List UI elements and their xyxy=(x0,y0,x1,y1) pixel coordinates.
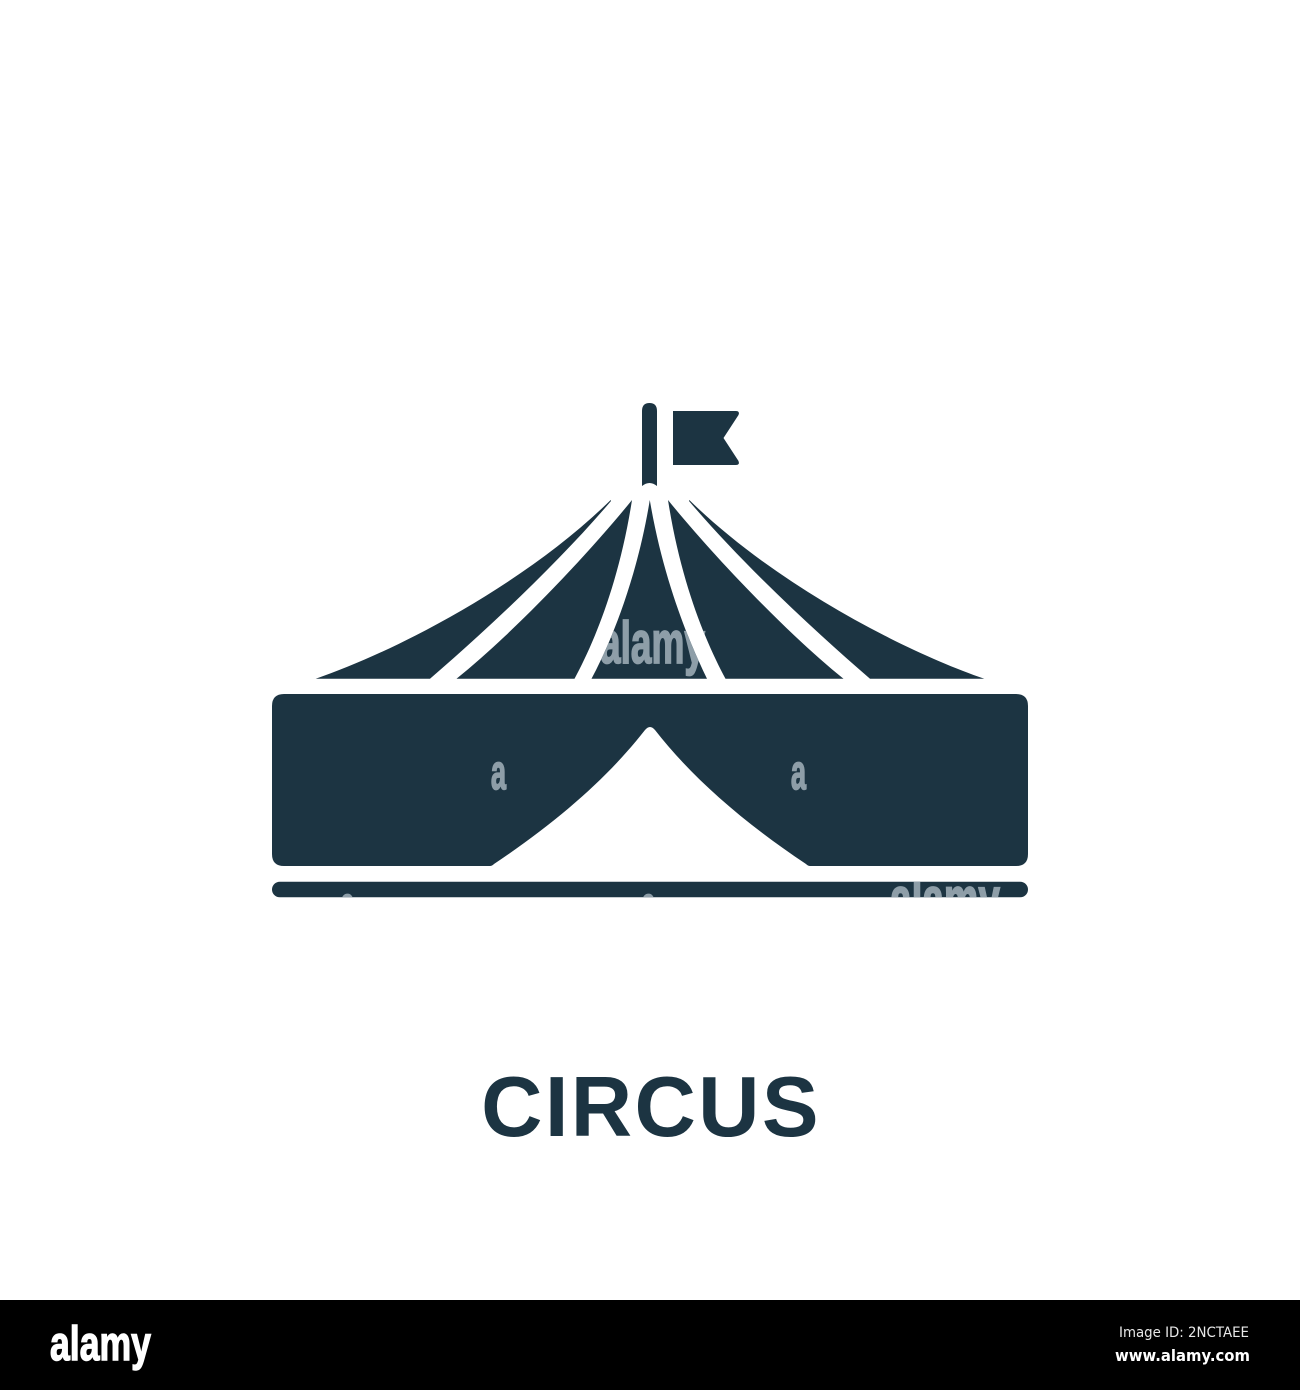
watermarks over the tent: a xyxy=(791,746,806,800)
ground line xyxy=(272,882,1028,897)
image id: Image ID: 2NCTAEE xyxy=(1119,1325,1249,1341)
icon: flag pole xyxy=(642,403,657,486)
footer logo: alamy xyxy=(50,1318,151,1371)
watermarks over the tent: alamy xyxy=(600,610,705,676)
watermarks over the tent: a xyxy=(641,878,656,932)
watermarks over the tent: alamy xyxy=(890,866,1000,932)
tent body with entrance xyxy=(272,694,1028,866)
title: CIRCUS xyxy=(481,1060,821,1155)
website: www.alamy.com xyxy=(1115,1346,1250,1365)
watermarks over the tent: a xyxy=(340,878,355,932)
tent roof stripes xyxy=(316,500,984,679)
circus infographic canvas xyxy=(0,403,1300,1390)
watermarks over the tent: a xyxy=(491,746,506,800)
icon: flag xyxy=(673,411,739,465)
footer bar xyxy=(0,1300,1300,1390)
watermarks over the tent xyxy=(342,619,1000,897)
icon: circus tent xyxy=(272,403,1028,897)
